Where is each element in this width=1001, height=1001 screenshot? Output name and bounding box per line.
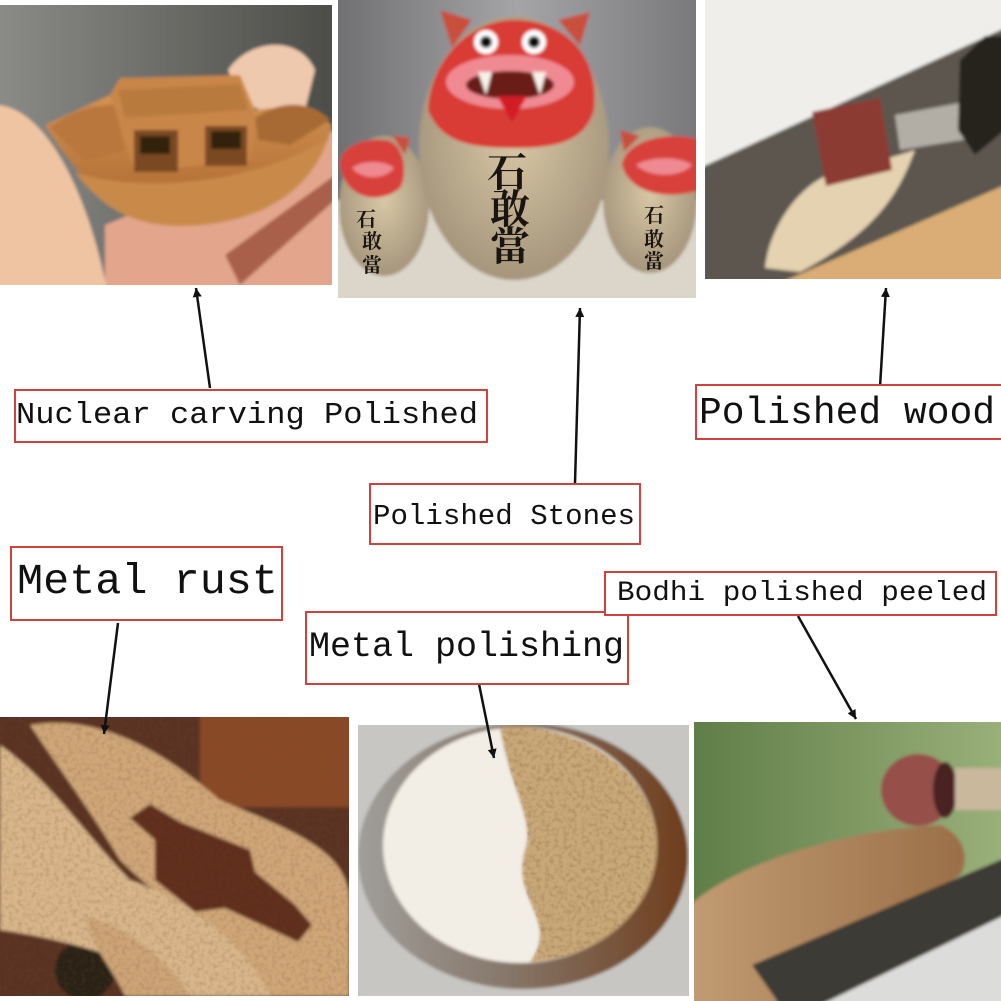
label: Metal rust: Metal rust [17,557,278,606]
label: Polished Stones: Polished Stones [373,500,635,533]
label: Metal rust [11,547,282,620]
stone inscription: 敢 [362,230,382,253]
label: Polished Stones [370,484,640,544]
label: Nuclear carving Polished [15,390,487,442]
label: Bodhi polished peeled [605,572,996,615]
arrow: to metal rust photo [104,623,118,734]
label: Metal polishing [306,612,628,684]
panel: nuclear carving photo [0,0,335,290]
stone inscription: 敢 [644,228,664,251]
stone inscription: 石 [356,208,376,231]
arrow: to bodhi photo [798,616,856,719]
stone inscription [356,150,664,277]
stone inscription: 石 [487,150,527,195]
panel: metal rust photo [0,712,355,1001]
label: Nuclear carving Polished: Nuclear carving Polished [16,398,478,433]
arrow: to metal polishing photo [479,684,494,758]
stone inscription: 敢 [490,187,530,232]
panel: polished wood photo [700,0,1001,285]
label: Bodhi polished peeled: Bodhi polished peeled [617,578,987,609]
arrow: to wood [880,288,886,387]
panel: bodhi polished peeled photo [690,718,1001,1001]
arrow: to carving [196,288,210,388]
stone inscription: 當 [644,250,664,273]
panel: metal polishing photo [350,720,695,1000]
panel: polished stones photo [330,0,705,305]
label: Polished wood: Polished wood [699,392,995,435]
arrow: to stones [575,308,580,483]
stone inscription: 當 [362,254,382,277]
label: Metal polishing: Metal polishing [309,627,624,667]
stone inscription: 石 [644,204,664,227]
stone inscription: 當 [490,224,530,269]
